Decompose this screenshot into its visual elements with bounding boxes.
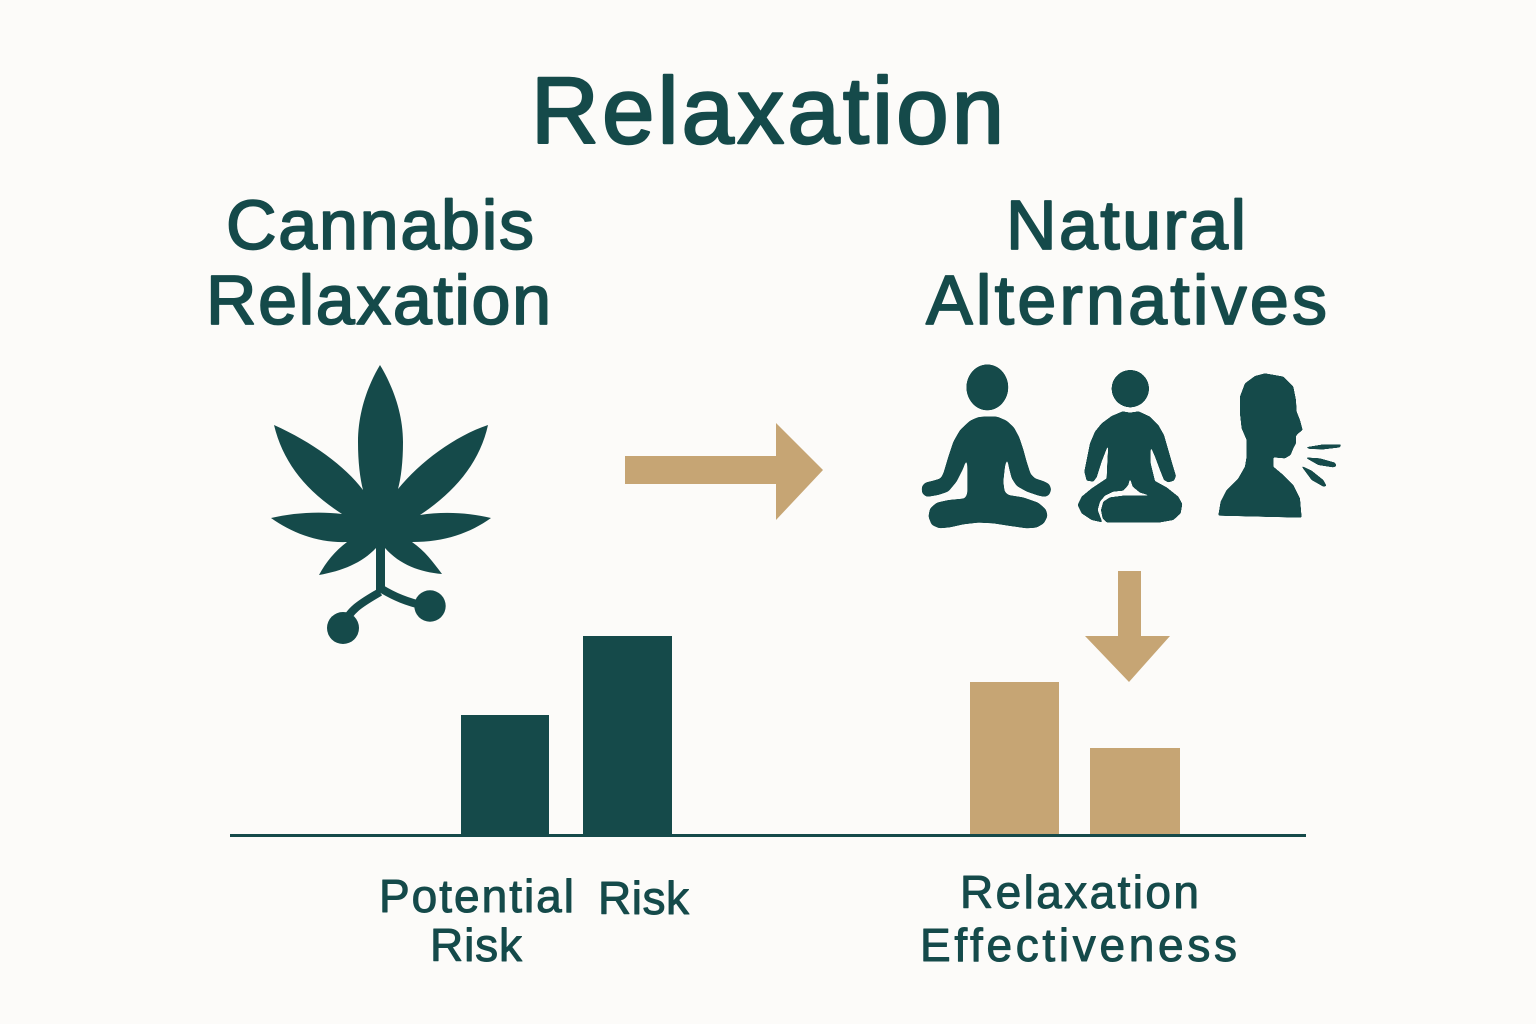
icon: head profile exhaling	[1218, 373, 1341, 518]
heading: cannabis relaxation: Relaxation	[206, 261, 551, 339]
heading: cannabis relaxation: Cannabis	[226, 186, 534, 264]
label: potential risk	[379, 870, 574, 971]
axis line	[230, 834, 1306, 837]
label: relaxation effectiveness: Relaxation	[960, 866, 1199, 918]
heading: natural alternatives: Alternatives	[926, 261, 1327, 339]
bars: relaxation effectiveness	[970, 682, 1180, 834]
label: potential risk: Potential	[379, 870, 574, 922]
heading: natural alternatives	[926, 186, 1327, 339]
label: risk: Risk	[598, 872, 690, 924]
heading: cannabis relaxation	[206, 186, 551, 339]
icon: cross-legged figure from behind	[1078, 370, 1182, 522]
label: relaxation effectiveness: Effectiveness	[920, 919, 1237, 971]
icon: cannabis leaf	[271, 365, 491, 644]
label: relaxation effectiveness	[920, 866, 1237, 971]
arrow: down	[1085, 571, 1170, 682]
panel: natural alternatives	[922, 186, 1341, 682]
heading: natural alternatives: Natural	[1006, 186, 1246, 264]
bars: potential risk	[461, 636, 672, 836]
bar chart	[230, 636, 1306, 971]
panel: cannabis relaxation	[206, 186, 551, 644]
arrow: right	[625, 423, 823, 520]
icon: seated meditation figure	[922, 364, 1051, 528]
label: potential risk: Risk	[430, 919, 523, 971]
title: Relaxation	[531, 58, 1004, 163]
